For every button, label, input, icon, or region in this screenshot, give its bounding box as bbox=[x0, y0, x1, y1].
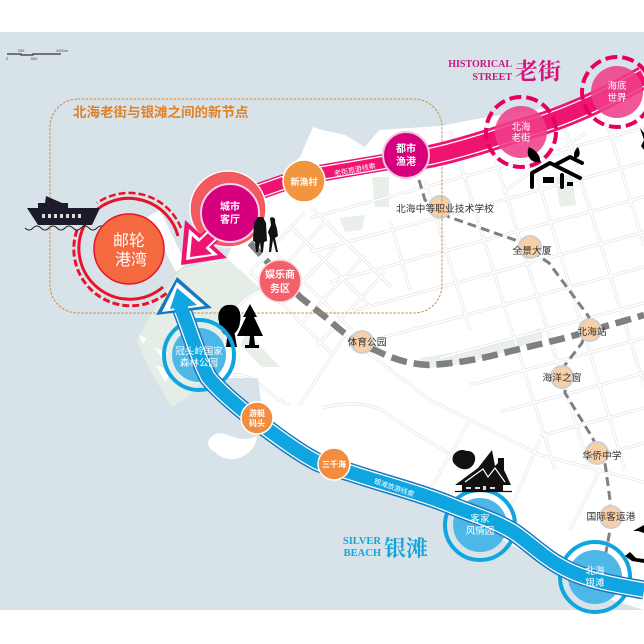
node: 北海老街: 老街 bbox=[511, 132, 531, 144]
station: 国际客运港 bbox=[587, 506, 636, 528]
icon: silhouettes of people bbox=[253, 217, 278, 252]
station: 北海站: 北海站 bbox=[577, 325, 607, 338]
node: 北海老街: 北海 bbox=[511, 121, 531, 133]
node: 三千海: 三千海 bbox=[322, 459, 346, 469]
node: 客家风情园 bbox=[445, 490, 515, 560]
icon: beach umbrella bbox=[633, 525, 644, 533]
node: 邮轮港湾: 邮轮 bbox=[113, 232, 145, 250]
scale bar bbox=[6, 48, 69, 61]
label: 冠头岭国家森林公园 bbox=[175, 346, 223, 369]
node: 城市客厅: 客厅 bbox=[220, 213, 240, 226]
node: 游艇码头 bbox=[241, 402, 273, 434]
node: 海底世界: 海底 bbox=[607, 80, 627, 92]
callout title: 北海老街与银滩之间的新节点 bbox=[73, 104, 249, 120]
node: 邮轮港湾: 港湾 bbox=[115, 251, 147, 269]
route label: 银滩旅游线索: 银滩旅游线索 bbox=[373, 476, 415, 499]
node: 都市渔港 bbox=[383, 132, 429, 178]
label: 北海银滩: 银滩 bbox=[585, 577, 605, 589]
road network bbox=[225, 100, 644, 530]
label: 客家风情园: 风情园 bbox=[466, 525, 494, 537]
station: 全景大厦: 全景大厦 bbox=[512, 244, 552, 257]
heading: historical street: HISTORICAL bbox=[448, 59, 512, 70]
heading: silver beach bbox=[343, 536, 428, 561]
label: 北海银滩: 北海 bbox=[585, 565, 605, 577]
scale bar: 0 bbox=[6, 56, 9, 61]
node: 北海银滩 bbox=[560, 542, 630, 612]
land base bbox=[137, 74, 644, 610]
station: 北海站 bbox=[577, 319, 607, 341]
metro line thin bbox=[419, 180, 610, 563]
node: 邮轮港湾 bbox=[94, 214, 164, 284]
station: 海洋之窗: 海洋之窗 bbox=[542, 371, 582, 384]
scale bar: 200 bbox=[18, 48, 25, 53]
node: 城市客厅: 城市 bbox=[220, 200, 240, 213]
node: 新渔村 bbox=[283, 160, 325, 202]
heading: silver beach: 银滩 bbox=[384, 536, 428, 561]
heading: silver beach: BEACH bbox=[344, 548, 381, 559]
node: 娱乐商务区: 务区 bbox=[270, 282, 290, 295]
metro line thick bbox=[250, 243, 644, 365]
label: 北海银滩 bbox=[585, 565, 605, 589]
pink arrow bbox=[181, 220, 227, 265]
station: 北海中等职业技术学校 bbox=[396, 196, 494, 218]
station: 国际客运港: 国际客运港 bbox=[587, 510, 636, 523]
station: 海洋之窗 bbox=[542, 366, 582, 388]
blue route band bbox=[180, 305, 644, 590]
icon: beach lounger bbox=[625, 552, 644, 563]
station: 北海中等职业技术学校: 北海中等职业技术学校 bbox=[396, 202, 494, 215]
heading: silver beach: SILVER bbox=[343, 536, 381, 547]
route label: 老街旅游线索: 老街旅游线索 bbox=[333, 161, 376, 178]
icon: hakka house bbox=[453, 450, 512, 492]
node: 海底世界: 世界 bbox=[607, 92, 627, 104]
blue arrow bbox=[156, 277, 212, 321]
icon: old street house bbox=[528, 147, 582, 187]
node: 都市渔港: 都市 bbox=[396, 142, 416, 155]
node: 游艇码头: 码头 bbox=[249, 418, 265, 428]
label: 冠头岭国家森林公园: 冠头岭国家 bbox=[175, 346, 223, 358]
station: 体育公园: 体育公园 bbox=[347, 336, 387, 348]
label: 客家风情园 bbox=[466, 513, 494, 537]
label: 冠头岭国家森林公园: 森林公园 bbox=[180, 357, 218, 369]
heading: historical street: STREET bbox=[473, 72, 512, 83]
node: 海底世界 bbox=[582, 57, 644, 127]
node: 北海老街 bbox=[486, 97, 556, 167]
callout frame bbox=[50, 99, 442, 313]
node: 城市客厅 outer bbox=[190, 171, 266, 247]
heading: historical street: 老街 bbox=[515, 59, 561, 84]
label: 客家风情园: 客家 bbox=[470, 513, 490, 525]
station: 华侨中学 bbox=[582, 442, 622, 464]
node: 娱乐商务区: 娱乐商 bbox=[265, 268, 295, 281]
icon: cruise ship bbox=[25, 196, 105, 230]
node: 城市客厅 bbox=[201, 184, 259, 242]
station: 全景大厦 bbox=[512, 236, 552, 258]
node: 娱乐商务区 bbox=[259, 260, 301, 302]
node: 三千海 bbox=[318, 448, 350, 480]
scale bar: 500 bbox=[31, 56, 38, 61]
cruise bay rings bbox=[74, 193, 181, 306]
heading: historical street bbox=[448, 59, 561, 84]
node: 都市渔港: 渔港 bbox=[396, 155, 416, 168]
scale bar: 1000m bbox=[56, 48, 69, 53]
station: 华侨中学: 华侨中学 bbox=[582, 449, 622, 462]
pink route band bbox=[240, 77, 644, 198]
icon: side building bbox=[640, 128, 644, 150]
station: 体育公园 bbox=[347, 331, 387, 353]
node: 新渔村: 新渔村 bbox=[290, 176, 318, 187]
icon: trees bbox=[218, 304, 263, 348]
node: 冠头岭国家森林公园 bbox=[164, 320, 234, 390]
node: 游艇码头: 游艇 bbox=[249, 408, 265, 418]
